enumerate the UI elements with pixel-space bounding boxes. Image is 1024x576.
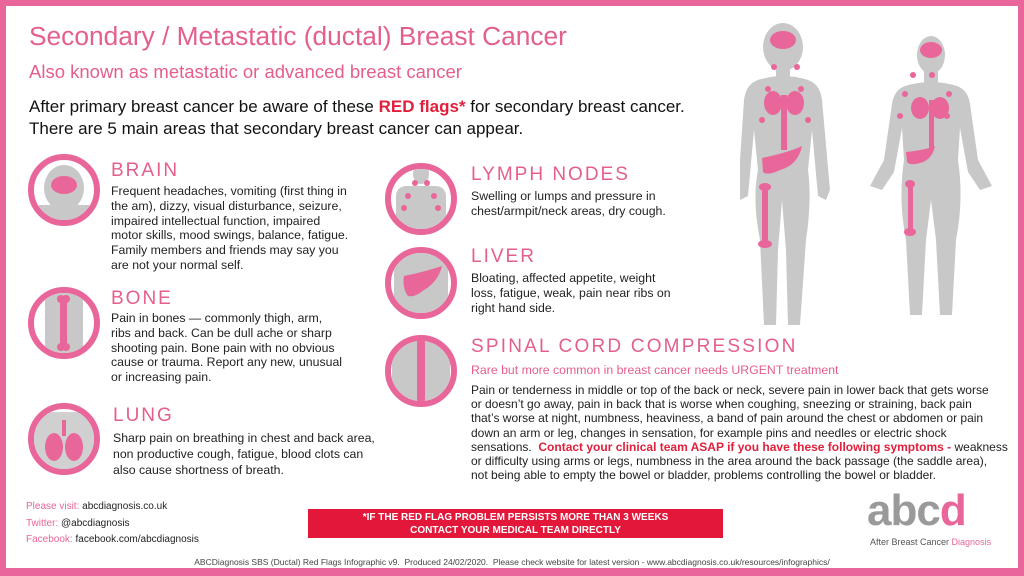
red flag banner: *IF THE RED FLAG PROBLEM PERSISTS MORE THAN 3 WEEKS	[363, 512, 668, 523]
panel: lymph nodes	[385, 163, 666, 235]
panel: lymph nodes: LYMPH NODES	[471, 164, 630, 185]
panel: bone: shooting pain. Bone pain with no obvious	[111, 341, 335, 355]
panel: lung: Sharp pain on breathing in chest and back area,	[113, 431, 375, 445]
icon: bone	[28, 287, 100, 359]
panel: spinal cord compression: or doesn’t go away, pain in back that is worse when coughing, sneezing or straining, back pain	[471, 397, 972, 411]
icon: lungs	[28, 403, 100, 475]
icon: lymph	[385, 163, 457, 235]
panel: spinal cord compression: Rare but more common in breast cancer needs URGENT treatment	[471, 363, 838, 377]
intro text	[29, 97, 685, 138]
footer credit: ABCDiagnosis SBS (Ductal) Red Flags Infographic v9. Produced 24/02/2020. Please check website for latest version - www.abcdiagnosis.co.uk/resources/infographics/	[194, 557, 830, 567]
panel: liver: loss, fatigue, weak, pain near ribs on	[471, 286, 671, 300]
panel: brain: the am), dizzy, visual disturbance, seizure,	[111, 199, 342, 213]
panel: spinal cord compression: not being able to empty the bowel or bladder, problems controlling the bowel or bladder.	[471, 468, 936, 482]
panel: bone: or increasing pain.	[111, 370, 211, 384]
panel: brain: Family members and friends may say you	[111, 243, 339, 257]
panel: liver: right hand side.	[471, 301, 555, 315]
panel: spinal cord compression: down an arm or leg, changes in sensation, for example pins and needles or electric shock	[471, 426, 947, 440]
panel: lymph nodes: chest/armpit/neck areas, dry cough.	[471, 204, 666, 218]
female figure	[738, 23, 830, 325]
panel: spinal cord compression: that’s worse at night, numbness, heaviness, a band of pain around the chest or abdomen or pain	[471, 411, 983, 425]
subtitle: Also known as metastatic or advanced breast cancer	[29, 61, 462, 82]
contact info	[26, 501, 199, 545]
panel: lung	[28, 403, 375, 477]
panel: lung: also cause shortness of breath.	[113, 463, 284, 477]
panel: bone: BONE	[111, 288, 173, 309]
red flag banner	[308, 509, 723, 538]
panel: brain: BRAIN	[111, 160, 179, 181]
logo	[867, 486, 991, 547]
logo: After Breast Cancer Diagnosis	[870, 537, 991, 547]
panel: brain: impaired intellectual function, impaired	[111, 214, 320, 228]
icon: spine	[385, 335, 457, 407]
panel: brain	[28, 154, 348, 272]
contact info: Twitter: @abcdiagnosis	[26, 518, 130, 528]
panel: bone: cause or trauma. Report any new, unusual	[111, 355, 342, 369]
contact info: Please visit: abcdiagnosis.co.uk	[26, 501, 167, 512]
panel: lymph nodes: Swelling or lumps and pressure in	[471, 189, 656, 203]
panel: brain: are not your normal self.	[111, 258, 244, 272]
panel: spinal cord compression: or difficulty using arms or legs, numbness in the area around the back passage (the saddle area),	[471, 454, 987, 468]
icon: liver	[385, 247, 457, 319]
panel: lung: non productive cough, fatigue, blood clots can	[113, 447, 363, 461]
intro text: After primary breast cancer be aware of these RED flags* for secondary breast cancer.	[29, 97, 685, 116]
panel: spinal cord compression: Pain or tenderness in middle or top of the back or neck, severe pain in lower back that gets worse	[471, 383, 989, 397]
panel: bone: Pain in bones — commonly thigh, arm,	[111, 311, 322, 325]
panel: bone: ribs and back. Can be dull ache or sharp	[111, 326, 332, 340]
panel: spinal cord compression: sensations. Contact your clinical team ASAP if you have these following symptoms - weakness	[471, 440, 1008, 454]
panel: spinal cord compression	[385, 335, 1008, 482]
panel: brain: motor skills, mood swings, balance, fatigue.	[111, 228, 348, 242]
logo: abcd	[867, 486, 966, 535]
panel: brain: Frequent headaches, vomiting (first thing in	[111, 184, 347, 198]
illustration: body figures	[740, 23, 992, 325]
panel: liver	[385, 246, 671, 319]
panel: liver: Bloating, affected appetite, weight	[471, 271, 655, 285]
panel: liver: LIVER	[471, 246, 536, 267]
icon: brain	[28, 154, 100, 226]
contact info: Facebook: facebook.com/abcdiagnosis	[26, 534, 199, 545]
red flag banner: CONTACT YOUR MEDICAL TEAM DIRECTLY	[410, 525, 621, 536]
title: Secondary / Metastatic (ductal) Breast Cancer	[29, 21, 567, 51]
male figure	[870, 36, 992, 315]
panel: lung: LUNG	[113, 405, 174, 426]
panel: bone	[28, 287, 342, 384]
intro text: There are 5 main areas that secondary breast cancer can appear.	[29, 119, 523, 138]
panel: spinal cord compression: SPINAL CORD COMPRESSION	[471, 336, 798, 357]
